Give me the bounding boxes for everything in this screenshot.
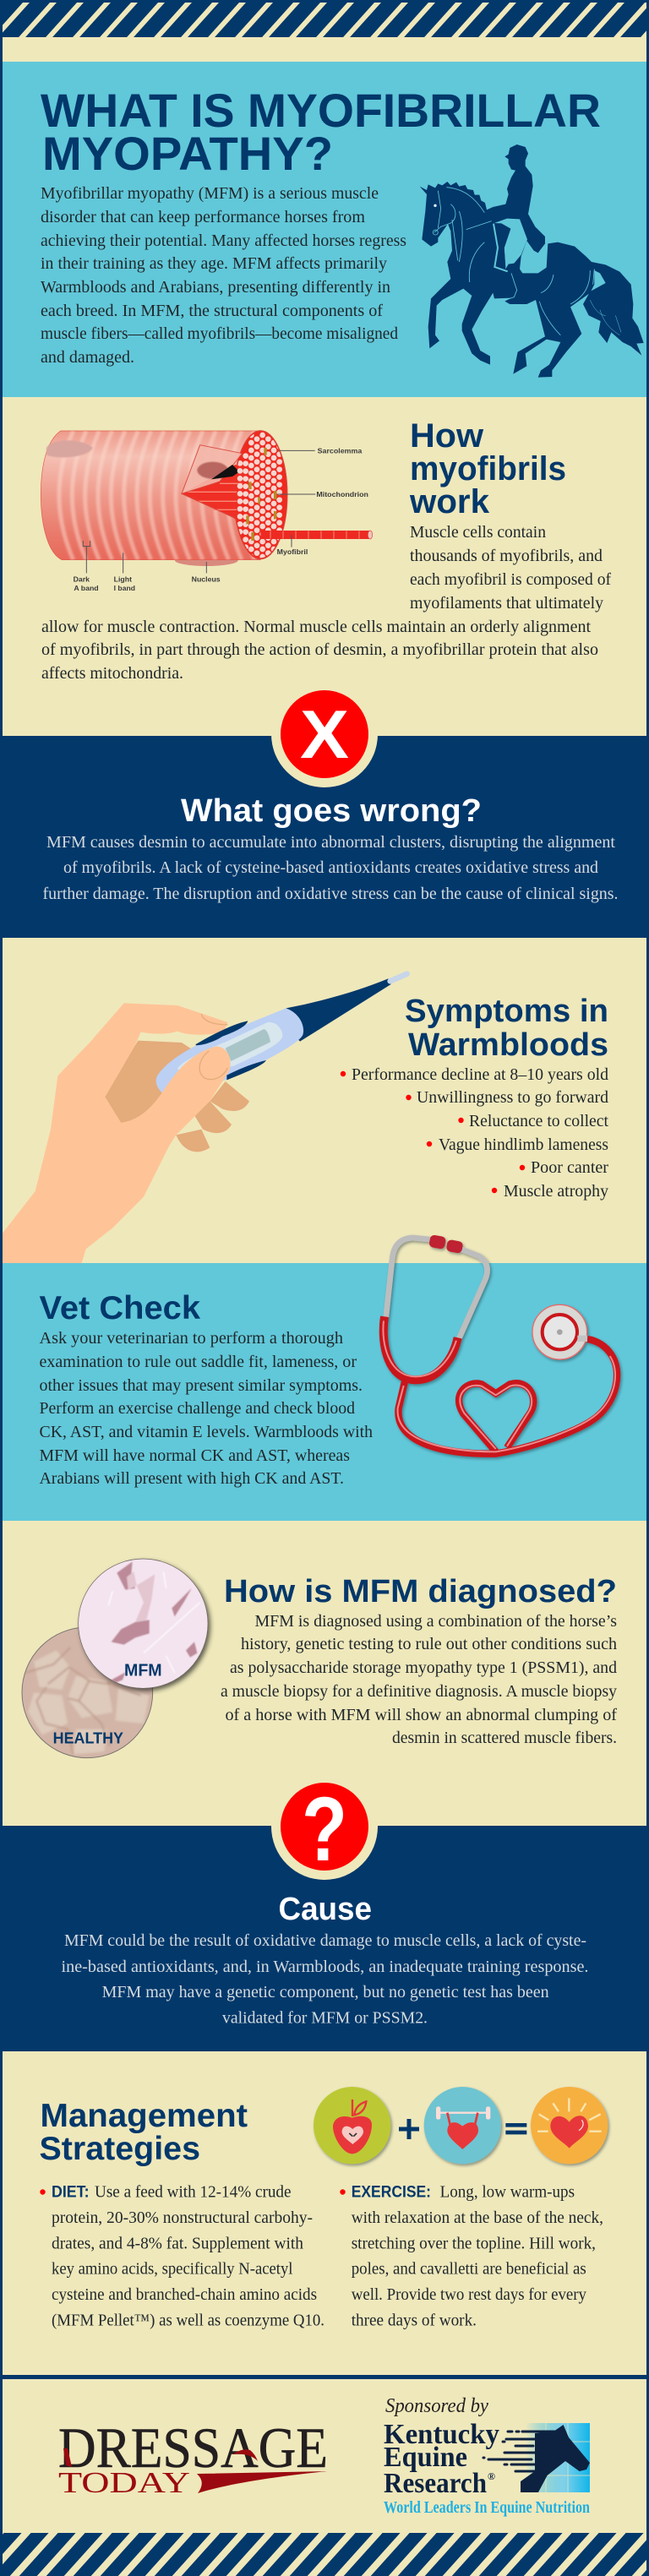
intro text: Myofibrillar myopathy (MFM) is a serious muscle bbox=[41, 184, 379, 203]
exercise column: well. Provide two rest days for every bbox=[352, 2285, 586, 2304]
text block bbox=[221, 1612, 617, 1747]
text block: Ask your veterinarian to perform a thorough bbox=[39, 1329, 343, 1348]
muscle fiber diagram: Myofibril bbox=[277, 547, 308, 556]
intro text: Warmbloods and Arabians, presenting differently in bbox=[41, 278, 390, 297]
intro text: and damaged. bbox=[41, 348, 134, 367]
biopsy comparison circles bbox=[22, 1559, 208, 1758]
muscle fiber diagram bbox=[41, 431, 373, 592]
panel: what goes wrong bbox=[0, 681, 649, 938]
text block: of myofibrils. A lack of cysteine-based antioxidants creates oxidative stress and bbox=[63, 858, 598, 877]
text block: of a horse with MFM will show an abnormal clumping of bbox=[225, 1706, 617, 1724]
heading: Warmbloods bbox=[408, 1027, 608, 1063]
icon: dressage horse and rider silhouette bbox=[420, 144, 644, 378]
panel: logos footer bbox=[0, 2375, 649, 2517]
icon: shining heart bbox=[531, 2087, 608, 2164]
text block bbox=[61, 1931, 588, 2028]
healthy tissue circle bbox=[22, 1627, 153, 1758]
heading: How bbox=[410, 417, 484, 455]
intro text: disorder that can keep performance horses from bbox=[41, 208, 365, 226]
text block bbox=[41, 523, 611, 683]
heading: Vet Check bbox=[39, 1290, 200, 1326]
diet column: key amino acids, specifically N-acetyl bbox=[52, 2259, 293, 2278]
logo: Dressage Today: TODAY bbox=[58, 2466, 190, 2499]
title bbox=[41, 84, 601, 180]
heading bbox=[405, 994, 608, 1063]
diet column: drates, and 4-8% fat. Supplement with bbox=[52, 2234, 303, 2252]
text block: thousands of myofibrils, and bbox=[410, 547, 603, 565]
muscle fiber diagram: A band bbox=[74, 584, 99, 592]
icon equation: diet plus exercise equals healthy heart bbox=[314, 2087, 608, 2164]
heading: myofibrils bbox=[410, 450, 566, 487]
text block: as polysaccharide storage myopathy type 1 (PSSM1), and bbox=[230, 1658, 617, 1677]
symptom list: Muscle atrophy bbox=[504, 1182, 608, 1201]
logo: Kentucky Equine Research: World Leaders In Equine Nutrition bbox=[384, 2498, 590, 2517]
text block: affects mitochondria. bbox=[41, 664, 183, 683]
panel: vet check bbox=[0, 1234, 649, 1521]
text block: further damage. The disruption and oxidative stress can be the cause of clinical signs. bbox=[42, 885, 619, 903]
symptom list: Vague hindlimb lameness bbox=[439, 1136, 608, 1154]
exercise column: with relaxation at the base of the neck, bbox=[352, 2208, 603, 2227]
panel: symptoms in warmbloods bbox=[0, 938, 649, 1263]
text block: MFM will have normal CK and AST, whereas bbox=[39, 1446, 350, 1465]
plus sign bbox=[399, 2119, 419, 2139]
muscle fiber diagram: Light bbox=[114, 575, 132, 583]
logo: Kentucky Equine Research: ® bbox=[488, 2470, 495, 2482]
heading: Cause bbox=[279, 1892, 372, 1927]
text block: ine-based antioxidants, and, in Warmbloods, an inadequate training response. bbox=[61, 1958, 588, 1976]
icon: red question mark badge bbox=[271, 1773, 378, 1880]
bottom striped banner bbox=[0, 2533, 649, 2576]
icon: heart lifting barbell bbox=[424, 2087, 501, 2164]
diet column: (MFM Pellet™) as well as coenzyme Q10. bbox=[52, 2312, 324, 2330]
exercise column: three days of work. bbox=[352, 2312, 477, 2330]
illustration: stethoscope with heart bbox=[383, 1234, 617, 1454]
text block: Arabians will present with high CK and AST. bbox=[39, 1469, 344, 1488]
sponsored by label: Sponsored by bbox=[385, 2395, 488, 2417]
logo: Kentucky Equine Research: Kentucky bbox=[384, 2419, 499, 2450]
exercise column: poles, and cavalletti are beneficial as bbox=[352, 2259, 586, 2278]
heading: Symptoms in bbox=[405, 994, 608, 1029]
icon: red question mark badge: ? bbox=[302, 1778, 347, 1880]
panel: what is myofibrillar myopathy bbox=[0, 62, 649, 397]
muscle fiber diagram: Nucleus bbox=[192, 575, 221, 583]
exercise column bbox=[340, 2183, 603, 2330]
illustration: hand holding thermometer bbox=[0, 974, 407, 1263]
icon: red X badge bbox=[271, 681, 378, 787]
text block: myofilaments that ultimately bbox=[410, 594, 603, 613]
diet column: Use a feed with 12-14% crude bbox=[95, 2183, 292, 2202]
logo: Dressage Today: DRESSAGE bbox=[58, 2415, 328, 2480]
text block: allow for muscle contraction. Normal muscle cells maintain an orderly alignment bbox=[41, 618, 591, 636]
exercise column: stretching over the topline. Hill work, bbox=[352, 2234, 596, 2252]
intro text: achieving their potential. Many affected horses regress bbox=[41, 231, 406, 250]
panel: cause bbox=[0, 1773, 649, 2051]
intro text bbox=[41, 184, 406, 367]
text block: examination to rule out saddle fit, lameness, or bbox=[39, 1353, 357, 1371]
heading: Management bbox=[41, 2098, 248, 2134]
intro text: each breed. In MFM, the structural components of bbox=[41, 302, 383, 320]
logo: Kentucky Equine Research: Research bbox=[384, 2468, 487, 2499]
text block: MFM causes desmin to accumulate into abnormal clusters, disrupting the alignment bbox=[46, 833, 615, 852]
symptom list: Reluctance to collect bbox=[469, 1112, 608, 1130]
muscle fiber diagram: Dark bbox=[74, 575, 90, 583]
symptom list: Unwillingness to go forward bbox=[417, 1088, 608, 1107]
text block: CK, AST, and vitamin E levels. Warmbloods with bbox=[39, 1423, 373, 1441]
text block: MFM may have a genetic component, but no genetic test has been bbox=[102, 1983, 549, 2001]
text block bbox=[39, 1329, 373, 1488]
icon: apple bbox=[314, 2087, 390, 2164]
diet column: protein, 20-30% nonstructural carbohy- bbox=[52, 2208, 313, 2227]
muscle fiber diagram: I band bbox=[114, 584, 135, 592]
symptom list bbox=[341, 1065, 608, 1201]
icon: red X badge: X bbox=[300, 697, 349, 773]
intro text: in their training as they age. MFM affects primarily bbox=[41, 254, 387, 273]
exercise column: Long, low warm-ups bbox=[440, 2183, 575, 2202]
MFM tissue circle bbox=[79, 1559, 208, 1688]
text block: each myofibril is composed of bbox=[410, 570, 611, 589]
text block: of myofibrils, in part through the action of desmin, a myofibrillar protein that also bbox=[41, 640, 598, 659]
diet column: DIET: bbox=[52, 2183, 90, 2202]
exercise column: EXERCISE: bbox=[352, 2183, 431, 2202]
muscle fiber diagram: Mitochondrion bbox=[316, 490, 368, 498]
diet column: cysteine and branched-chain amino acids bbox=[52, 2285, 317, 2304]
symptom list: Poor canter bbox=[531, 1158, 608, 1177]
logo: Kentucky Equine Research: Equine bbox=[384, 2442, 467, 2473]
MFM tissue circle: MFM bbox=[124, 1660, 162, 1680]
top striped banner bbox=[0, 0, 649, 37]
text block: Perform an exercise challenge and check blood bbox=[39, 1399, 355, 1418]
panel: how myofibrils work bbox=[41, 424, 612, 678]
logo: Kentucky Equine Research bbox=[384, 2419, 590, 2517]
heading: work bbox=[409, 483, 490, 520]
text block bbox=[42, 833, 619, 903]
text block: MFM is diagnosed using a combination of the horse’s bbox=[255, 1612, 617, 1631]
title: WHAT IS MYOFIBRILLAR bbox=[41, 84, 601, 137]
diet column bbox=[40, 2183, 324, 2330]
text block: MFM could be the result of oxidative damage to muscle cells, a lack of cyste- bbox=[64, 1931, 586, 1950]
symptom list: Performance decline at 8–10 years old bbox=[352, 1065, 608, 1084]
intro text: muscle fibers—called myofibrils—become misaligned bbox=[41, 324, 398, 343]
muscle fiber diagram: Sarcolemma bbox=[318, 447, 363, 455]
panel: how is MFM diagnosed bbox=[22, 1558, 617, 1759]
text block: a muscle biopsy for a definitive diagnosis. A muscle biopsy bbox=[221, 1682, 617, 1701]
heading bbox=[39, 2098, 248, 2167]
heading: What goes wrong? bbox=[181, 793, 482, 829]
heading: How is MFM diagnosed? bbox=[224, 1574, 617, 1609]
title: MYOPATHY? bbox=[42, 127, 333, 180]
text block: desmin in scattered muscle fibers. bbox=[392, 1729, 617, 1747]
healthy tissue circle: HEALTHY bbox=[53, 1729, 124, 1746]
equals sign bbox=[505, 2125, 526, 2132]
text block: other issues that may present similar symptoms. bbox=[39, 1376, 363, 1395]
text block: validated for MFM or PSSM2. bbox=[222, 2009, 428, 2028]
heading: Strategies bbox=[39, 2131, 200, 2167]
text block: history, genetic testing to rule out other conditions such bbox=[241, 1635, 617, 1653]
text block: Muscle cells contain bbox=[410, 523, 546, 542]
panel: management strategies bbox=[0, 2051, 649, 2375]
heading bbox=[409, 417, 566, 520]
